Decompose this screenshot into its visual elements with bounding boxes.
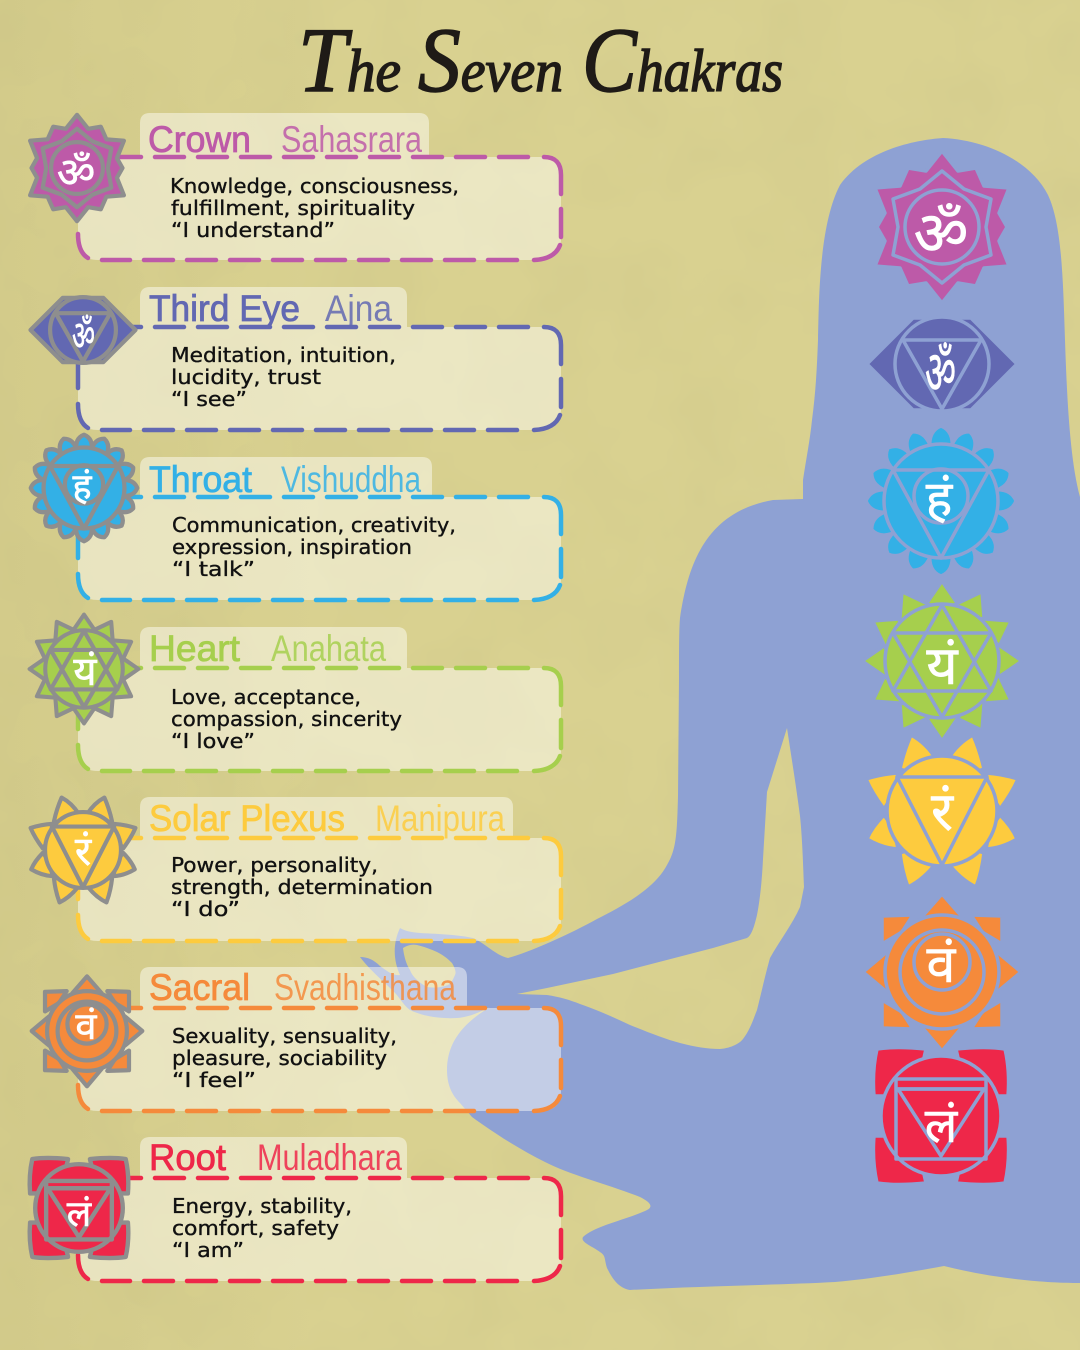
icon: small sacral chakra [32, 976, 142, 1086]
heading: third eye: Third Eye [149, 288, 300, 329]
description: solar plexus: “I do” [171, 897, 240, 921]
description: heart: compassion, sincerity [171, 707, 402, 731]
heading: solar plexus: Solar Plexus [149, 798, 345, 839]
heading: root: Root [149, 1137, 227, 1178]
description: root [172, 1194, 352, 1262]
icon: small crown chakra [30, 115, 124, 221]
icon: large crown chakra [875, 151, 1009, 303]
heading: heart: Heart [149, 628, 241, 669]
description: solar plexus: Power, personality, [171, 853, 378, 877]
icon: large heart chakra: यं [926, 637, 959, 707]
description: crown: fulfillment, spirituality [171, 196, 415, 220]
icon: small heart chakra [29, 614, 139, 724]
icon: large solar plexus chakra: रं [931, 783, 954, 853]
meditating body silhouette [360, 138, 1080, 1290]
title: The [298, 9, 401, 111]
icon: large throat chakra [866, 426, 1016, 576]
description: crown [170, 174, 459, 242]
panel: sacral [78, 967, 561, 1111]
icon: large third eye chakra: ॐ [925, 340, 956, 418]
description: third eye [171, 343, 396, 411]
icon: small third eye chakra [30, 297, 136, 368]
description: solar plexus: strength, determination [171, 875, 433, 899]
description: throat: Communication, creativity, [172, 513, 456, 537]
heading: heart: Anahata [271, 628, 386, 669]
icon: small root chakra [30, 1158, 128, 1258]
icon: small heart chakra: यं [73, 650, 97, 702]
heading: crown [148, 119, 422, 160]
icon: small solar plexus chakra: रं [75, 830, 92, 882]
panel: heart [78, 627, 561, 771]
description: third eye: lucidity, trust [171, 365, 321, 389]
description: sacral [172, 1024, 397, 1092]
description: root: Energy, stability, [172, 1194, 352, 1218]
description: sacral: Sexuality, sensuality, [172, 1024, 397, 1048]
icon: large root chakra [873, 1048, 1009, 1184]
heading: crown: Crown [148, 119, 251, 160]
description: throat [172, 513, 456, 581]
icon: small crown chakra: ॐ [57, 150, 95, 205]
icon: large sacral chakra: वं [927, 936, 957, 1004]
description: heart [171, 685, 402, 753]
icon: large third eye chakra [867, 317, 1017, 418]
panel: solar plexus [78, 797, 561, 941]
description: crown: Knowledge, consciousness, [170, 174, 459, 198]
icon: small sacral chakra: वं [75, 1005, 97, 1055]
heading: third eye: Ajna [325, 288, 392, 329]
heading: third eye [149, 288, 392, 329]
icon: small third eye chakra: ॐ [72, 313, 95, 368]
icon: small solar plexus chakra [31, 798, 135, 902]
heading: throat: Throat [149, 459, 253, 500]
description: crown: “I understand” [171, 218, 335, 242]
icon: large sacral chakra [863, 894, 1021, 1051]
heading: sacral: Svadhisthana [274, 967, 456, 1008]
heading: root: Muladhara [257, 1137, 402, 1178]
description: throat: expression, inspiration [172, 535, 412, 559]
description: root: “I am” [172, 1238, 244, 1262]
description: sacral: pleasure, sociability [172, 1046, 387, 1070]
title: Chakras [582, 9, 783, 111]
heading: solar plexus: Manipura [375, 798, 505, 839]
panel: throat [78, 457, 561, 600]
heading: throat: Vishuddha [281, 459, 421, 500]
panel: root [78, 1137, 561, 1281]
heading: sacral: Sacral [149, 967, 250, 1008]
description: solar plexus [171, 853, 433, 921]
heading: root [149, 1137, 402, 1178]
title [298, 9, 783, 111]
heading: solar plexus [149, 798, 505, 839]
icon: large crown chakra: ॐ [914, 201, 968, 279]
panel: third eye [78, 287, 561, 430]
description: third eye: Meditation, intuition, [171, 343, 396, 367]
description: root: comfort, safety [172, 1216, 339, 1240]
title: Seven [418, 9, 563, 111]
icon: large root chakra: लं [925, 1099, 959, 1162]
icon: small throat chakra: हं [72, 467, 92, 514]
description: sacral: “I feel” [172, 1068, 256, 1092]
icon: small root chakra: लं [67, 1194, 92, 1241]
description: heart: “I love” [171, 729, 255, 753]
icon: large heart chakra [862, 581, 1022, 741]
icon: small throat chakra [31, 435, 137, 541]
heading: sacral [149, 967, 456, 1008]
icon: large throat chakra: हं [926, 472, 954, 537]
heading: throat [149, 459, 421, 500]
description: heart: Love, acceptance, [171, 685, 361, 709]
icon: large solar plexus chakra [866, 735, 1018, 887]
heading: crown: Sahasrara [281, 119, 422, 160]
panel: crown [78, 113, 561, 260]
description: third eye: “I see” [171, 387, 247, 411]
description: throat: “I talk” [172, 557, 255, 581]
heading: heart [149, 628, 386, 669]
